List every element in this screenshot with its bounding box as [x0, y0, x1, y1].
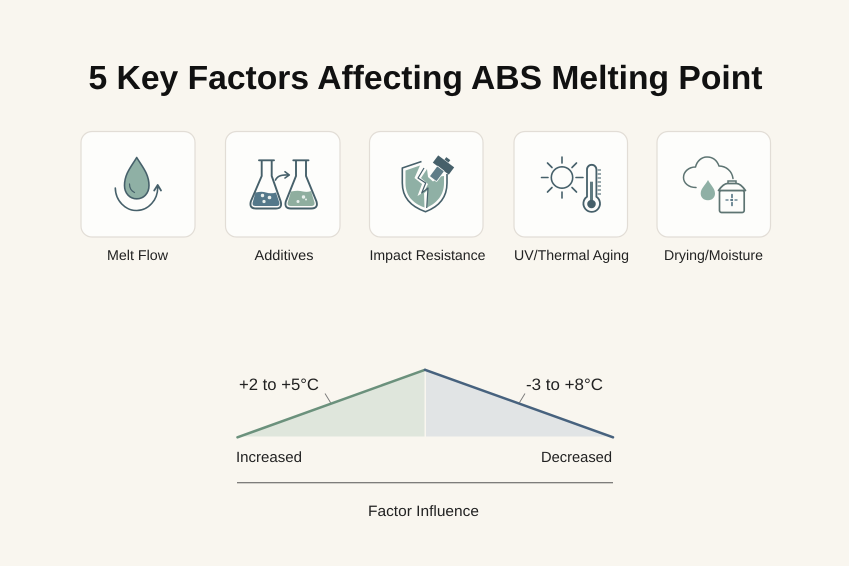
icon: cloud, droplet and dryer	[684, 157, 746, 212]
label: impact resistance: Impact Resistance	[370, 247, 486, 263]
label: UV / thermal aging: UV/Thermal Aging	[514, 248, 629, 264]
label: increased: Increased	[236, 450, 302, 466]
label: additives: Additives	[254, 248, 314, 264]
card: impact resistance	[370, 132, 483, 237]
card: UV / thermal aging	[514, 132, 628, 237]
card: additives	[226, 132, 340, 237]
panel: impact resistance	[370, 132, 486, 263]
label: melt flow: Melt Flow	[107, 248, 169, 264]
line: increased slope	[238, 370, 425, 437]
leader: decreased value	[520, 394, 525, 402]
axis title: Factor Influence	[368, 503, 479, 520]
icon: sun and thermometer	[542, 157, 601, 212]
chart: factor influence triangle	[236, 370, 613, 520]
panel: UV / thermal aging	[514, 132, 629, 264]
card: melt flow	[81, 132, 195, 237]
value: increased: +2 to +5°C	[239, 376, 319, 394]
panel: drying / moisture	[657, 132, 770, 264]
label: decreased: Decreased	[541, 450, 612, 466]
icon: droplet with circular arrow	[115, 158, 161, 210]
icon: two flasks	[250, 160, 317, 208]
panel: melt flow	[81, 132, 195, 264]
title: 5 Key Factors Affecting ABS Melting Point	[88, 60, 763, 97]
line: decreased slope	[425, 370, 613, 437]
label: drying / moisture: Drying/Moisture	[664, 248, 763, 264]
value: decreased: -3 to +8°C	[526, 376, 603, 394]
area: increased side	[238, 370, 424, 436]
axis line	[237, 482, 613, 484]
card: drying / moisture	[657, 132, 770, 237]
leader: increased value	[325, 394, 330, 402]
area: decreased side	[426, 370, 612, 436]
icon: cracked shield with hammer	[402, 153, 456, 212]
panel: additives	[226, 132, 340, 264]
